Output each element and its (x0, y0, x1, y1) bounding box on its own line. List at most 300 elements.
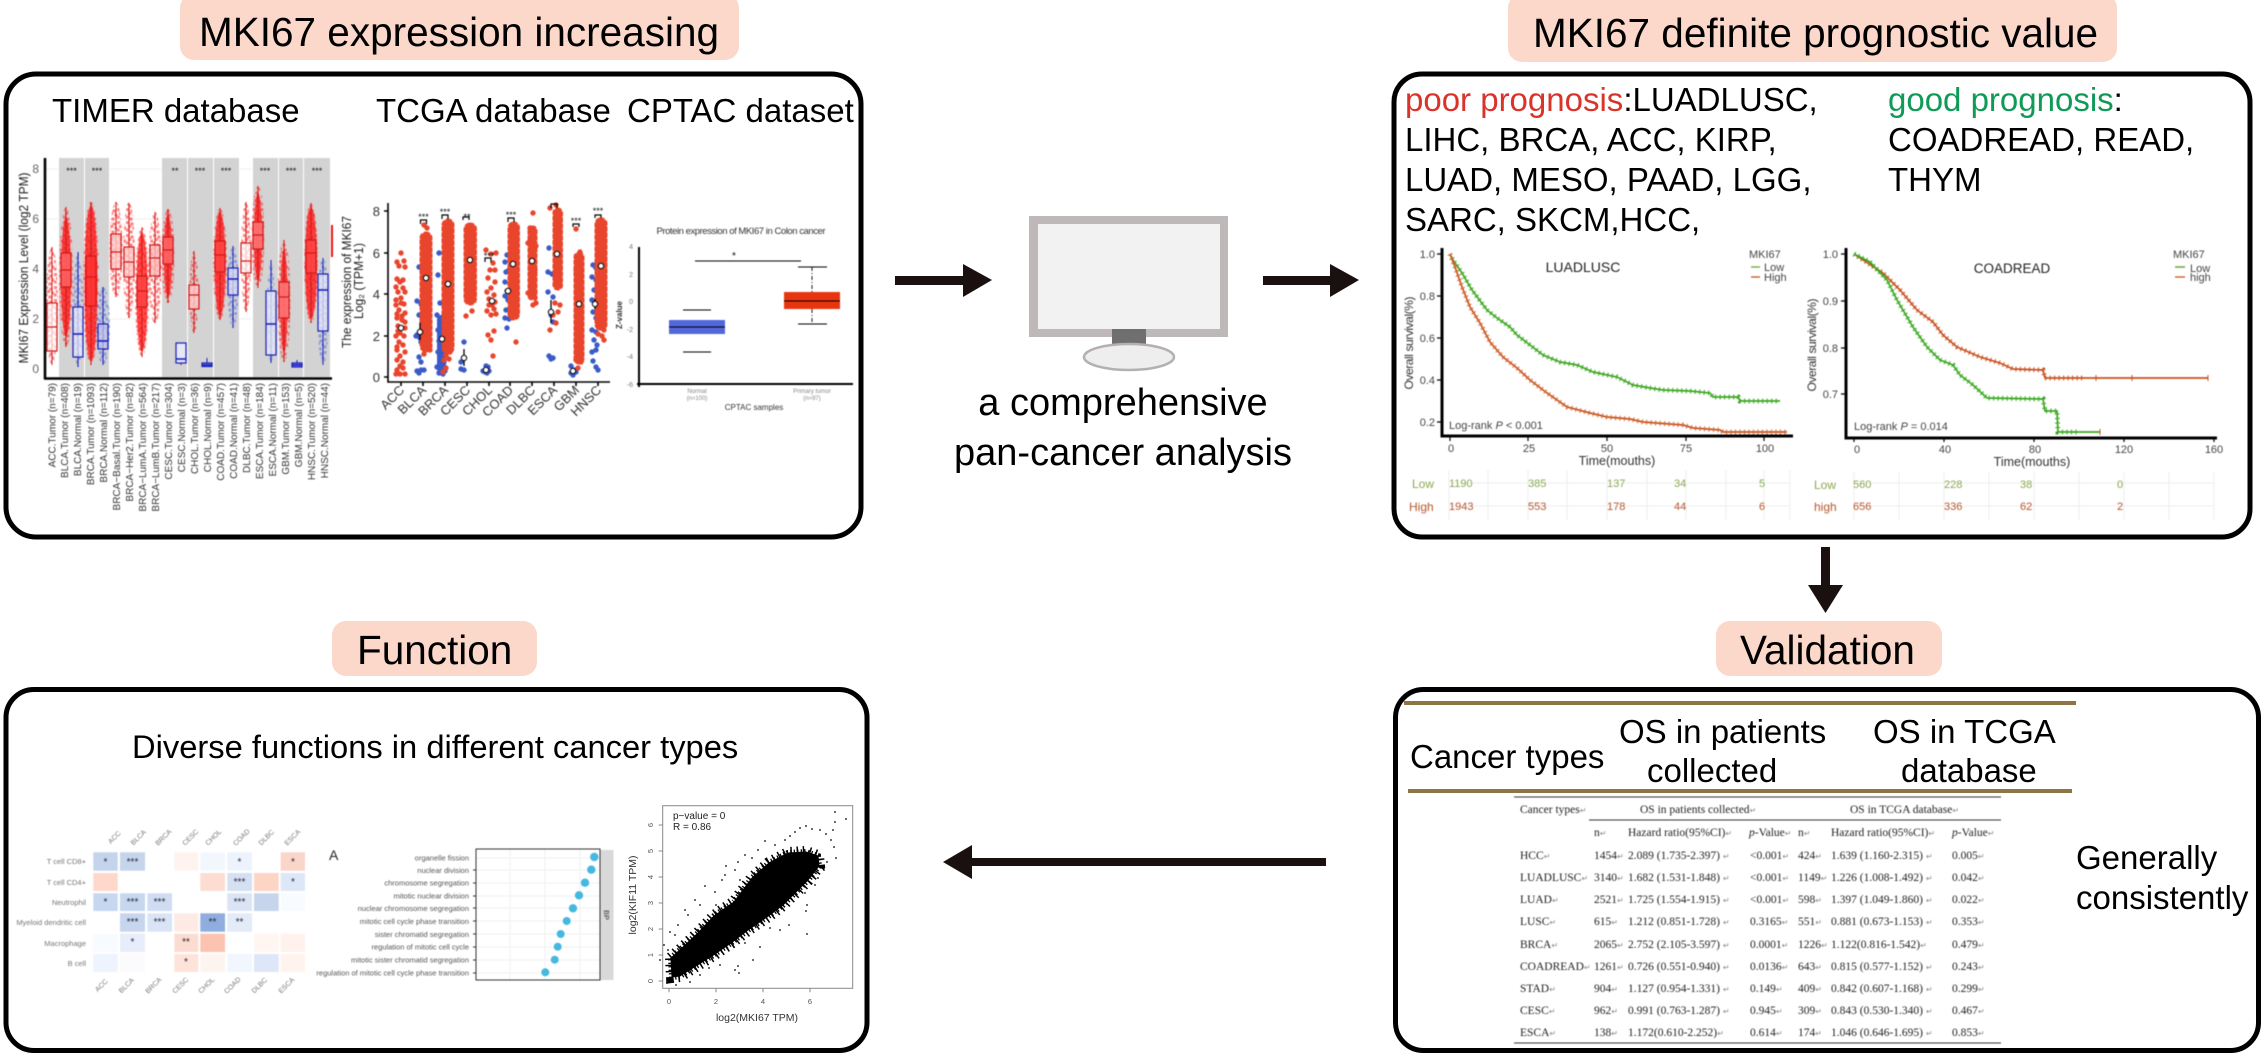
survival comparison table: 1.212 (0.851-1.728) ↵ (1628, 916, 1730, 928)
y tick labels: 6 (646, 823, 655, 827)
y ticks: 1.0 (1823, 249, 1838, 261)
survival comparison table: 2.752 (2.105-3.597) ↵ (1628, 939, 1730, 951)
red tumor swarms (421, 209, 606, 363)
statistics: p−value = 0 (673, 811, 726, 822)
survival comparison table: 0.353↵ (1952, 916, 1985, 928)
heatmap stars: *** (234, 877, 245, 888)
survival comparison table: n↵ (1798, 827, 1810, 839)
text: poor prognosis list: SARC, SKCM,HCC, (1405, 201, 1700, 238)
y ticks: 4 (629, 244, 633, 251)
heading pill: Validation (1716, 621, 1942, 676)
x ticks: 75 (1680, 443, 1692, 455)
text: poor prognosis list: poor prognosis:LUADLUSC, (1405, 81, 1818, 118)
term labels: mitotic sister chromatid segregation (351, 956, 469, 964)
chart: CPTAC box plot (615, 226, 853, 412)
bottom column labels: BRCA (145, 976, 164, 995)
risk table: 2 (2117, 501, 2123, 513)
survival comparison table: 0.0136↵ (1750, 961, 1788, 973)
dots (541, 853, 598, 976)
legend: Low (1764, 262, 1784, 274)
y axis ticks: 6 (32, 212, 39, 226)
term labels: regulation of mitotic cell cycle phase transition (316, 968, 469, 978)
x axis labels: HNSC.Tumor (n=520) (307, 383, 318, 480)
term labels: nuclear division (417, 866, 469, 875)
significance brackets and stars: *** (571, 216, 582, 226)
x ticks: 80 (2029, 444, 2041, 456)
heatmap stars: * (291, 877, 295, 888)
chart: immune correlation heatmap (16, 828, 305, 996)
survival comparison table: STAD↵ (1520, 983, 1556, 995)
survival comparison table: LUAD↵ (1520, 894, 1559, 906)
term labels: mitotic nuclear division (394, 892, 469, 900)
x axis labels: DLBC (503, 383, 538, 418)
heatmap stars: * (131, 937, 135, 948)
survival comparison table: 0.467↵ (1952, 1005, 1985, 1017)
text: diverse functions: Diverse functions in different cancer types (132, 728, 738, 765)
significance brackets and stars: *** (440, 207, 451, 217)
top column labels: CHOL (205, 829, 223, 847)
axis titles (1402, 296, 1655, 468)
heatmap stars: *** (234, 897, 245, 908)
y tick labels: 4 (646, 875, 655, 879)
x axis labels: CHOL (459, 383, 495, 419)
risk table: 1943 (1449, 501, 1473, 513)
x axis labels: BRCA−Her2.Tumor (n=82) (125, 383, 136, 502)
curves (1450, 254, 1787, 432)
survival comparison table: LUADLUSC↵ (1520, 872, 1588, 884)
survival comparison table: 0.843 (0.530-1.340) ↵ (1831, 1005, 1933, 1017)
x labels: (n=97) (803, 396, 821, 402)
row labels: B cell (68, 959, 86, 968)
top column labels: ACC (107, 830, 123, 846)
chart: TIMER box plot (17, 158, 333, 512)
significance stars: ** (171, 166, 179, 176)
top column labels: BLCA (130, 829, 148, 847)
survival comparison table: 598↵ (1798, 894, 1822, 906)
x axis labels: CESC (437, 383, 473, 419)
significance brackets and stars: ** (463, 212, 471, 222)
survival comparison table: 962↵ (1594, 1005, 1618, 1017)
y axis ticks: 4 (32, 262, 39, 276)
legend: High (1764, 272, 1787, 284)
risk table: 38 (2020, 479, 2032, 491)
significance bracket (695, 251, 801, 262)
risk table: 137 (1607, 478, 1625, 490)
y axis ticks: 8 (32, 162, 39, 176)
x tick labels: 4 (761, 997, 765, 1006)
x axis labels: ESCA (524, 382, 560, 418)
survival comparison table: 0.991 (0.763-1.287) ↵ (1628, 1005, 1730, 1017)
point clouds (46, 186, 333, 367)
x ticks: 50 (1601, 443, 1613, 455)
x ticks: 0 (1448, 443, 1454, 455)
y ticks (627, 244, 633, 389)
x ticks: 40 (1939, 444, 1951, 456)
y axis ticks: 6 (373, 246, 380, 261)
survival comparison table: 1.172(0.610-2.252)↵ (1628, 1027, 1724, 1039)
heatmap stars: *** (127, 897, 138, 908)
survival comparison table: COADREAD↵ (1520, 961, 1591, 973)
table header: OS in TCGA database: OS in TCGA (1873, 713, 2056, 750)
heading: TIMER database: TIMER database (52, 92, 300, 129)
heatmap stars: *** (127, 917, 138, 928)
y tick labels: 2 (646, 927, 655, 931)
y ticks: -4 (627, 354, 633, 361)
x axis labels: ACC (377, 383, 407, 413)
axes (44, 158, 332, 379)
term labels: regulation of mitotic cell cycle (371, 942, 469, 952)
term labels: nuclear chromosome segregation (358, 904, 469, 913)
survival comparison table: Hazard ratio(95%CI)↵ (1628, 827, 1732, 839)
heatmap stars: ** (236, 917, 243, 928)
heatmap stars: ** (209, 917, 216, 928)
y ticks: 0.6 (1420, 333, 1435, 345)
heatmap stars: * (104, 897, 108, 908)
y axis title: The expression of MKI67 (340, 216, 354, 348)
significance stars: *** (195, 166, 206, 176)
axes (384, 203, 610, 386)
survival comparison table: p-Value↵ (1748, 827, 1791, 839)
survival comparison table: 0.022↵ (1952, 894, 1985, 906)
log-rank note: Log-rank P = 0.014 (1854, 421, 1948, 433)
legend (1749, 249, 1787, 284)
bottom column labels: CESC (172, 977, 190, 995)
risk table: 34 (1674, 478, 1686, 490)
survival comparison table: 1226↵ (1798, 939, 1828, 951)
risk table: 560 (1853, 479, 1871, 491)
x ticks: 0 (1854, 444, 1860, 456)
chart: KIF11 vs MKI67 scatter (627, 806, 853, 1024)
risk table: High (1409, 500, 1434, 514)
blue normal swarms (416, 248, 598, 375)
table header: OS in patients collected: collected (1647, 752, 1777, 789)
row labels: T cell CD4+ (47, 878, 87, 887)
heading pill: Validation: Validation (1740, 627, 1915, 673)
y ticks: 0.7 (1823, 389, 1838, 401)
panel letter: A (329, 847, 339, 863)
row labels: Neutrophil (52, 898, 86, 907)
term labels: organelle fission (415, 854, 469, 862)
significance brackets and stars (418, 204, 604, 262)
y axis title: Log₂ (TPM+1) (352, 243, 366, 319)
survival comparison table: 424↵ (1798, 850, 1822, 862)
survival comparison table: CESC↵ (1520, 1005, 1555, 1017)
y axis title: MKI67 Expression Level (log2 TPM) (17, 172, 31, 364)
row labels: Macrophage (44, 939, 86, 948)
y axis ticks: 0 (373, 370, 380, 385)
significance stars: *** (286, 166, 297, 176)
legend (2173, 249, 2211, 284)
x axis labels: GBM.Tumor (n=153) (281, 383, 292, 475)
dense blue BRCA (437, 315, 446, 373)
x labels: (n=100) (687, 396, 707, 402)
y ticks: 2 (629, 272, 633, 279)
text: generally consistently: Generally (2076, 839, 2218, 876)
significance stars (66, 166, 323, 176)
survival comparison table: 0.881 (0.673-1.153) ↵ (1831, 916, 1933, 928)
caption: a comprehensive pan-cancer analysis: a comprehensive (978, 382, 1268, 424)
x axis labels: ESCA.Normal (n=11) (268, 383, 279, 476)
significance stars: *** (312, 166, 323, 176)
chart: LUADLUSC survival curve (1402, 248, 1793, 520)
risk table: 656 (1853, 501, 1871, 513)
plot frame (473, 849, 614, 980)
x tick labels: 6 (808, 997, 812, 1006)
table header: OS in patients collected (1619, 713, 1826, 789)
survival comparison table: 643↵ (1798, 961, 1822, 973)
risk table: Low (1412, 477, 1434, 491)
legend: MKI67 (1749, 249, 1781, 261)
y ticks: 0.9 (1823, 296, 1838, 308)
survival comparison table: 0.243↵ (1952, 961, 1985, 973)
x axis labels: ACC.Tumor (n=79) (48, 383, 58, 467)
table header: OS in TCGA database: database (1901, 752, 2037, 789)
risk table: 62 (2020, 501, 2032, 513)
x ticks: 25 (1523, 443, 1535, 455)
panel: prognostic value (1394, 74, 2250, 537)
plot frame (663, 806, 853, 988)
term labels: sister chromatid segregation (375, 930, 469, 939)
statistics: R = 0.86 (673, 822, 712, 833)
row labels: T cell CD8+ (47, 857, 87, 866)
top column labels (107, 828, 302, 848)
y title: Z-value (615, 300, 624, 329)
row labels: Myeloid dendritic cell (16, 918, 86, 927)
text: good prognosis list: THYM (1888, 161, 1982, 198)
x axis labels: BRCA.Tumor (n=1093) (86, 383, 97, 485)
x axis labels: GBM (551, 383, 582, 414)
survival comparison table: 0.149↵ (1750, 983, 1783, 995)
risk table: 0 (2117, 479, 2123, 491)
risk table: 385 (1528, 478, 1546, 490)
survival comparison table: 1149↵ (1798, 872, 1827, 884)
x tick labels: 2 (714, 997, 718, 1006)
x axis labels: BLCA (394, 382, 429, 417)
y axis ticks: 0 (32, 362, 39, 376)
survival comparison table: 615↵ (1594, 916, 1618, 928)
survival comparison table: 0.726 (0.551-0.940) ↵ (1628, 961, 1730, 973)
text: poor prognosis list: LUAD, MESO, PAAD, LGG, (1405, 161, 1812, 198)
chart: GO enrichment dot plot (316, 847, 614, 980)
log-rank note: Log-rank P < 0.001 (1449, 420, 1543, 432)
y ticks: 0 (629, 299, 633, 306)
x ticks (1854, 444, 2223, 456)
y axis ticks: 2 (32, 312, 39, 326)
y axis ticks: 2 (373, 329, 380, 344)
survival comparison table: 1.725 (1.554-1.915) ↵ (1628, 894, 1730, 906)
axes (637, 247, 853, 387)
risk table: 1190 (1449, 478, 1473, 490)
top column labels: ESCA (284, 828, 302, 847)
survival comparison table: 0.853↵ (1952, 1027, 1985, 1039)
heading pill: Function (332, 621, 537, 676)
significance stars: *** (66, 166, 77, 176)
x axis labels: HNSC.Normal (n=44) (320, 383, 331, 478)
axis titles: Time(mouths) (1579, 454, 1655, 468)
plot title: LUADLUSC (1546, 259, 1620, 275)
significance stars: *** (221, 166, 232, 176)
panel: validation (1396, 690, 2258, 1050)
survival comparison table: 0.3165↵ (1750, 916, 1788, 928)
chart: COADREAD survival curve (1805, 248, 2223, 520)
y tick labels (646, 823, 655, 983)
bottom column labels (94, 976, 296, 996)
survival comparison table: 1261↵ (1594, 961, 1624, 973)
x axis labels: CESC.Normal (n=3) (177, 383, 188, 472)
x axis labels: BRCA−LumA.Tumor (n=564) (138, 383, 149, 512)
x axis labels: ESCA.Tumor (n=184) (255, 383, 266, 479)
survival comparison table: 3140↵ (1594, 872, 1624, 884)
survival comparison table: 1.046 (0.646-1.695) ↵ (1831, 1027, 1933, 1039)
axis titles (627, 856, 798, 1024)
y ticks (1420, 249, 1435, 429)
significance brackets and stars: *** (506, 210, 517, 220)
heatmap stars: *** (127, 857, 138, 868)
survival comparison table: BRCA↵ (1520, 939, 1558, 951)
survival comparison table: OS in patients collected↵ (1640, 804, 1756, 816)
survival comparison table: 0.479↵ (1952, 939, 1985, 951)
top column labels: BRCA (155, 828, 174, 847)
survival comparison table: 0.042↵ (1952, 872, 1985, 884)
significance brackets and stars: *** (418, 212, 429, 222)
box plot whiskers and boxes (47, 186, 328, 367)
heatmap stars (104, 857, 295, 968)
axis titles: log2(KIF11 TPM) (627, 856, 639, 934)
risk table: 6 (1759, 501, 1765, 513)
risk table: 178 (1607, 501, 1625, 513)
y tick labels: 0 (646, 979, 655, 983)
survival comparison table: 1.397 (1.049-1.860) ↵ (1831, 894, 1933, 906)
survival comparison table: <0.001↵ (1750, 850, 1789, 862)
y tick labels: 1 (646, 953, 655, 957)
survival comparison table: 904↵ (1594, 983, 1618, 995)
x tick labels (667, 997, 812, 1006)
y ticks: 0.2 (1420, 417, 1435, 429)
axis titles: log2(MKI67 TPM) (716, 1012, 798, 1024)
x axis labels (48, 383, 331, 512)
axes ticks (659, 825, 810, 992)
text: good prognosis list: COADREAD, READ, (1888, 121, 2194, 158)
heading pill: MKI67 expression increasing: MKI67 expression increasing (199, 9, 719, 55)
survival comparison table: 1454↵ (1594, 850, 1624, 862)
significance stars: *** (260, 166, 271, 176)
significance stars: *** (92, 166, 103, 176)
x axis labels: CHOL.Normal (n=9) (203, 383, 214, 472)
x axis labels: COAD.Tumor (n=457) (216, 383, 227, 481)
x ticks: 160 (2205, 444, 2223, 456)
x axis labels: BRCA−LumB.Tumor (n=217) (151, 383, 162, 512)
survival comparison table: 1.639 (1.160-2.315) ↵ (1831, 850, 1933, 862)
x axis labels: COAD.Normal (n=41) (229, 383, 240, 479)
survival comparison table: 309↵ (1798, 1005, 1822, 1017)
survival comparison table: 0.0001↵ (1750, 939, 1788, 951)
heatmap stars: *** (154, 897, 165, 908)
survival comparison table: <0.001↵ (1750, 894, 1789, 906)
y axis ticks (373, 204, 380, 385)
risk table: 5 (1759, 478, 1765, 490)
top column labels: DLBC (258, 829, 276, 847)
legend: high (2190, 272, 2211, 284)
chart title: Protein expression of MKI67 in Colon cancer (656, 226, 826, 237)
survival comparison table: 2521↵ (1594, 894, 1624, 906)
survival comparison table: 0.945↵ (1750, 1005, 1783, 1017)
y ticks: 1.0 (1420, 249, 1435, 261)
text: generally consistently: consistently (2076, 879, 2249, 916)
icon: computer monitor (1029, 216, 1228, 370)
axis titles: Overall survival(%) (1402, 296, 1416, 390)
x labels: Primary tumor (793, 389, 831, 395)
risk table: 336 (1944, 501, 1962, 513)
survival comparison table: 0.842 (0.607-1.168) ↵ (1831, 983, 1933, 995)
chart: TCGA swarm plot (340, 203, 610, 420)
arrow: prognosis to validation (1808, 547, 1843, 613)
y ticks (1823, 249, 1838, 401)
x labels: Normal (687, 389, 707, 395)
risk table: 553 (1528, 501, 1546, 513)
text: good prognosis list: good prognosis: (1888, 81, 2123, 118)
table header rules (1404, 703, 2076, 791)
heading pill: MKI67 definite prognostic value (1508, 0, 2117, 62)
survival comparison table: 0.005↵ (1952, 850, 1985, 862)
axes (1440, 248, 1793, 436)
survival comparison table: 2.089 (1.735-2.397) ↵ (1628, 850, 1730, 862)
term labels (316, 854, 469, 978)
heatmap stars: * (238, 857, 242, 868)
y ticks: -6 (627, 382, 633, 389)
survival comparison table: 1.682 (1.531-1.848) ↵ (1628, 872, 1730, 884)
survival comparison table: 0.815 (0.577-1.152) ↵ (1831, 961, 1933, 973)
table header: OS in TCGA database (1873, 713, 2056, 789)
y ticks: 0.4 (1420, 375, 1435, 387)
survival comparison table: 1.122(0.816-1.542)↵ (1831, 939, 1927, 951)
survival comparison table: 0.299↵ (1952, 983, 1985, 995)
x axis labels: DLBC.Tumor (n=48) (242, 383, 253, 473)
bottom column labels: DLBC (251, 977, 269, 995)
heading: CPTAC dataset: CPTAC dataset (627, 92, 854, 129)
text: poor prognosis list: LIHC, BRCA, ACC, KIRP, (1405, 121, 1777, 158)
survival comparison table: 138↵ (1594, 1027, 1618, 1039)
survival comparison table: LUSC↵ (1520, 916, 1556, 928)
point cloud (671, 852, 819, 977)
bottom column labels: ESCA (278, 976, 296, 995)
top column labels: COAD (232, 828, 252, 848)
text: poor prognosis list (1405, 81, 1818, 238)
significance brackets and stars: *** (593, 206, 604, 216)
term labels: chromosome segregation (384, 878, 469, 888)
bottom column labels: ACC (94, 978, 110, 994)
x axis labels: CHOL.Tumor (n=36) (190, 383, 201, 474)
risk table: high (1814, 500, 1837, 514)
x title: CPTAC samples (725, 403, 783, 412)
risk table: 44 (1674, 501, 1686, 513)
heatmap cells (93, 852, 305, 972)
row labels (16, 857, 87, 968)
bottom column labels: BLCA (118, 977, 136, 995)
risk table (1814, 472, 2214, 520)
survival comparison table (1514, 797, 2001, 1043)
x axis labels: BLCA.Normal (n=19) (73, 383, 84, 476)
survival comparison table: 2065↵ (1594, 939, 1624, 951)
survival comparison table: ESCA↵ (1520, 1027, 1556, 1039)
heading pill: Function: Function (357, 627, 512, 673)
legend: Low (2190, 263, 2210, 275)
survival comparison table: HCC↵ (1520, 850, 1550, 862)
mean points with error bars (398, 251, 604, 374)
heatmap stars: * (104, 857, 108, 868)
top column labels: CESC (182, 829, 200, 847)
x labels (687, 389, 831, 402)
scattered points (660, 812, 846, 985)
